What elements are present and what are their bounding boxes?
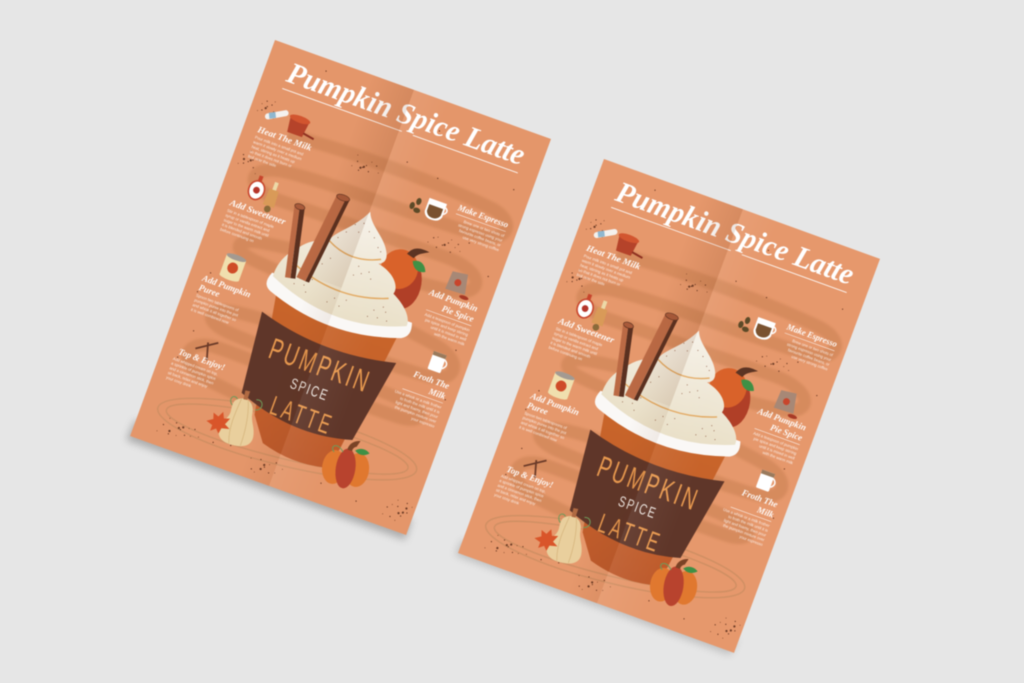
step: add sweetener: before continuing on [220, 227, 255, 243]
step: top and enjoy: Add whipped cream on top, [172, 356, 219, 377]
step: make espresso: Brew one or two shots of [792, 338, 835, 358]
small pumpkin [319, 437, 373, 491]
step: add pumpkin puree: and whisk it all together so [520, 420, 566, 440]
step: heat the milk: boil over the side [576, 272, 606, 287]
step: heat the milk: Heat The Milk [255, 124, 314, 153]
cup body [552, 409, 727, 596]
step: add pumpkin puree: it is well combined now [519, 424, 558, 443]
step: top and enjoy [493, 448, 560, 514]
step: froth the milk: light and foamy, then pour [723, 518, 768, 538]
step: add pumpkin puree: pumpkin puree into the pot [522, 415, 568, 436]
fold shading [227, 75, 460, 502]
step: froth the milk: to froth the milk until it is [399, 396, 441, 415]
step: froth the milk: Milk [427, 386, 448, 401]
squash [544, 504, 593, 567]
step: add sweetener: Add Sweetener [228, 197, 288, 227]
step: froth the milk: the pumpkin mixture over [722, 523, 766, 543]
step: add pumpkin pie spice: Pie Spice [440, 303, 475, 324]
maple leaf [204, 408, 234, 437]
title: Pumpkin Spice Latte [611, 176, 858, 292]
sleeve label [575, 450, 704, 565]
step: add pumpkin pie spice [415, 264, 488, 347]
step: froth the milk: the pumpkin mixture over [394, 404, 438, 424]
step: make espresso: Make Espresso [785, 321, 839, 349]
poster sheet [458, 159, 880, 653]
title underline [611, 207, 847, 293]
step: add pumpkin puree: Puree [197, 282, 221, 299]
step: make espresso: Brew one or two shots of [463, 219, 506, 238]
sleeve label: LATTE [266, 390, 338, 441]
step: top and enjoy: Top & Enjoy! [177, 346, 227, 372]
step: add pumpkin puree: Add Pumpkin [200, 272, 252, 299]
step: add pumpkin pie spice: Add Pumpkin [755, 405, 808, 433]
sleeve label: SPICE [616, 492, 659, 522]
step: heat the milk: Heat The Milk [584, 242, 643, 272]
step: add pumpkin puree: Spoon two tablespoons of [524, 410, 568, 431]
step: make espresso: strong espresso using your [457, 222, 504, 243]
step: froth the milk [387, 343, 460, 429]
poster sheet [130, 40, 551, 535]
sleeve label: LATTE [594, 508, 666, 559]
step: top and enjoy: a sprinkle of pumpkin spice [499, 478, 545, 499]
step: froth the milk: to froth the milk until it is [728, 514, 769, 533]
title underline [282, 88, 518, 173]
step: top and enjoy: Add whipped cream on top, [500, 473, 547, 494]
step: add sweetener: Add Sweetener [556, 315, 616, 345]
cup body [224, 291, 398, 479]
squash [216, 387, 264, 449]
step: heat the milk: heat, stirring as it heats up [251, 144, 296, 164]
step: froth the milk: Milk [755, 504, 776, 520]
step: add sweetener: it is blended and smooth [550, 340, 591, 359]
poster: left [130, 40, 551, 535]
sleeve label: PUMPKIN [593, 450, 704, 518]
title: Pumpkin Spice Latte [282, 57, 529, 172]
step: heat the milk: Pour milk into a small pot and [254, 135, 304, 157]
step: add sweetener [547, 287, 627, 370]
step: top and enjoy: a sprinkle of pumpkin spice [171, 360, 217, 381]
step: make espresso: strong espresso using your [786, 342, 833, 362]
step: heat the milk [575, 222, 650, 296]
step: froth the milk: Froth The [740, 487, 779, 509]
cinnamon sticks [599, 299, 679, 407]
cup sleeve [557, 430, 726, 570]
sleeve label: PUMPKIN [265, 332, 376, 400]
step: add pumpkin puree: pumpkin puree into the pot [194, 297, 240, 318]
step: top and enjoy: your cosy drink [165, 375, 192, 388]
step: top and enjoy: your cosy drink [493, 492, 520, 506]
small pumpkin [647, 555, 701, 609]
step: make espresso: Make Espresso [456, 202, 510, 230]
step: top and enjoy: Top & Enjoy! [505, 464, 555, 490]
step: add pumpkin puree [189, 246, 262, 329]
step: add sweetener: before continuing on [548, 345, 583, 361]
step: add pumpkin pie spice: pie spice and keep stirring [424, 317, 469, 337]
cup lid rim [260, 272, 413, 352]
scattered spice specks [468, 173, 872, 644]
step: froth the milk: light and foamy, then pour [395, 399, 439, 419]
swirl path [146, 120, 514, 523]
step: froth the milk: Froth The [411, 368, 451, 391]
step: add pumpkin pie spice: with the warm milk [762, 450, 794, 465]
step: add pumpkin puree: Spoon two tablespoons of [195, 293, 240, 313]
cup lid rim [588, 390, 742, 471]
step: add sweetener: syrup or vanilla extract and [225, 212, 270, 233]
pumpkin behind cream [696, 357, 767, 437]
step: add pumpkin pie spice: pie spice and keep stirring [753, 436, 797, 456]
step: add pumpkin puree [518, 364, 590, 446]
step: heat the milk: warm it slowly over a medium [253, 139, 303, 161]
step: add sweetener: sugar to the warm milk until [552, 335, 598, 356]
step: add pumpkin puree: it is well combined now [190, 307, 230, 325]
maple leaf [532, 525, 562, 554]
step: add sweetener: Stir in a tablespoon of maple [555, 326, 604, 348]
step: top and enjoy: and a cinnamon stick, then [497, 483, 542, 503]
step: froth the milk [716, 462, 788, 547]
step: heat the milk: so that it does not burn or [578, 267, 622, 287]
step: make espresso: use very strong coffee [791, 354, 829, 372]
poster shadow: right [455, 540, 738, 655]
fold shading [555, 194, 789, 620]
sleeve label: SPICE [288, 374, 331, 404]
step: froth the milk: your espresso [739, 534, 764, 547]
step: heat the milk: so that it does not burn or [249, 149, 293, 169]
step: top and enjoy [165, 330, 232, 397]
step: froth the milk: your espresso [411, 416, 436, 429]
step: heat the milk: boil over the side [247, 153, 278, 168]
step: add sweetener: syrup or vanilla extract and [553, 331, 599, 351]
cinnamon sticks [270, 180, 351, 289]
step: add pumpkin puree: Add Pumpkin [528, 390, 581, 417]
step: add pumpkin pie spice: with the warm milk [433, 331, 465, 347]
step: froth the milk: Use a whisk or a milk frother [723, 507, 771, 528]
whipped cream [267, 188, 439, 340]
step: top and enjoy: sit back, relax and enjoy [495, 487, 536, 506]
step: top and enjoy: and a cinnamon stick, then [169, 365, 214, 386]
whipped cream [596, 307, 768, 458]
step: froth the milk: Use a whisk or a milk frother [394, 388, 443, 410]
step: add pumpkin puree: and whisk it all together so [192, 302, 238, 323]
step: add pumpkin puree: Puree [526, 400, 550, 417]
poster: right [458, 159, 880, 653]
pumpkin behind cream [368, 238, 438, 319]
cup sleeve [229, 312, 397, 452]
step: add pumpkin pie spice: Add a teaspoon of pumpkin [753, 430, 799, 451]
step: add pumpkin pie spice: Add Pumpkin [427, 287, 479, 314]
step: heat the milk [246, 104, 321, 177]
step: add pumpkin pie spice [743, 383, 816, 465]
step: make espresso [733, 306, 839, 372]
step: make espresso: favourite coffee beans, or [458, 228, 502, 248]
step: make espresso [405, 187, 511, 253]
step: make espresso: use very strong coffee [462, 235, 501, 253]
step: top and enjoy: sit back, relax and enjoy [167, 370, 208, 389]
step: heat the milk: Pour milk into a small pot and [583, 253, 633, 275]
step: heat the milk: warm it slowly over a medium [581, 258, 632, 280]
step: add pumpkin pie spice: until it is mixed in well [430, 324, 467, 342]
scattered spice specks [140, 54, 543, 526]
step: add sweetener [219, 169, 298, 251]
step: add pumpkin pie spice: Add a teaspoon of pumpkin [424, 312, 471, 332]
step: add sweetener: Stir in a tablespoon of maple [226, 208, 275, 229]
swirl path [474, 239, 843, 641]
sleeve label [247, 332, 376, 448]
step: add pumpkin pie spice: until it is mixed in well [759, 443, 796, 461]
step: add pumpkin pie spice: Pie Spice [769, 422, 804, 443]
step: heat the milk: heat, stirring as it heats up [580, 262, 625, 283]
step: add sweetener: sugar to the warm milk until [223, 217, 270, 238]
step: make espresso: favourite coffee beans, or [787, 347, 831, 367]
poster shadow: left [126, 420, 412, 540]
step: add sweetener: it is blended and smooth [221, 222, 263, 241]
